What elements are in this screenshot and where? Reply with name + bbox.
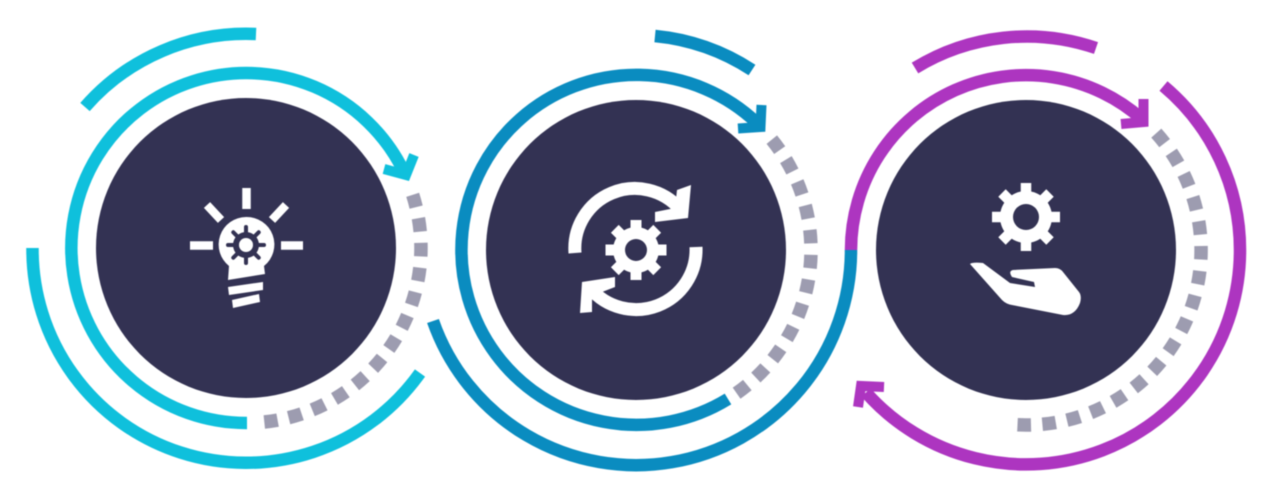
dashed progress arc bbox=[737, 140, 811, 393]
panel: delivery stage (purple) bbox=[851, 36, 1240, 464]
outer arc bottom bbox=[32, 248, 420, 463]
outer arc top left bbox=[85, 34, 256, 107]
inner ring with arrow bbox=[851, 75, 1144, 250]
outer arc top bbox=[655, 36, 752, 70]
dashed progress arc bbox=[264, 195, 421, 422]
dark circle bbox=[96, 98, 396, 398]
outer arc top bbox=[915, 36, 1096, 68]
dark circle bbox=[486, 100, 786, 400]
inner ring with arrow bbox=[71, 73, 414, 423]
outer arc bottom bbox=[433, 250, 851, 465]
dashed progress arc bbox=[1018, 133, 1201, 425]
icon: light bulb with gear bbox=[190, 188, 303, 308]
panel: process stage (blue) bbox=[433, 36, 851, 465]
panel: idea stage (cyan) bbox=[32, 34, 421, 463]
inner ring with arrow bbox=[461, 75, 762, 425]
dark circle bbox=[876, 100, 1176, 400]
icon: gear with circular arrows bbox=[575, 185, 696, 313]
icon: hand holding gear bbox=[970, 183, 1081, 315]
outer arc with arrow bbox=[858, 86, 1240, 464]
